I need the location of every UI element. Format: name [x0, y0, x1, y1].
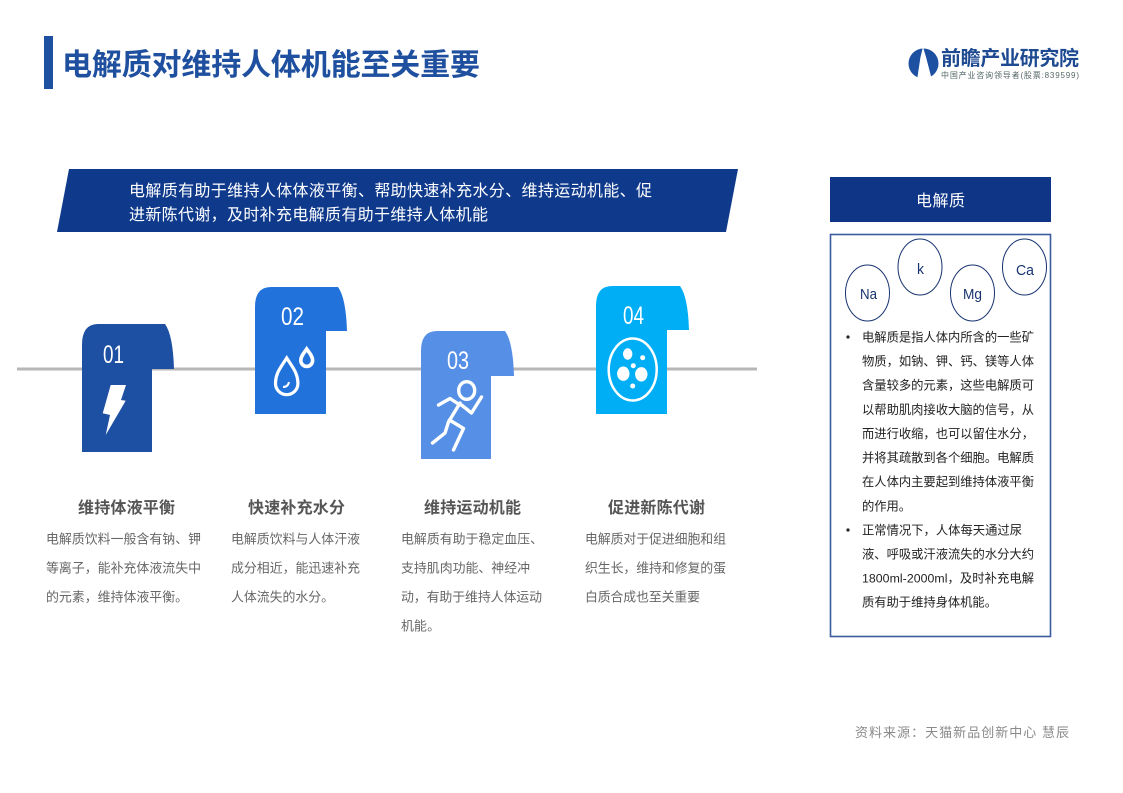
- column 3 text: [401, 498, 547, 634]
- description: 电解质有助于稳定血压、: [401, 532, 543, 546]
- logo tagline: 中国产业咨询领导者(股票:839599): [941, 70, 1079, 80]
- step 04 tab: [596, 286, 689, 414]
- panel: electrolytes: [830, 234, 1050, 636]
- icon: logo tower: [908, 47, 938, 80]
- title accent bar: [44, 36, 53, 89]
- step number 02: 02: [281, 303, 304, 331]
- source note: 资料来源：天猫新品创新中心 慧辰: [855, 725, 1069, 740]
- bullet list: 物质，如钠、钾、钙、镁等人体: [862, 354, 1034, 368]
- title: 电解质对维持人体机能至关重要: [62, 49, 480, 82]
- element circle Na: [846, 265, 890, 321]
- bullet list: 电解质是指人体内所含的一些矿: [862, 330, 1034, 344]
- description: 电解质饮料与人体汗液: [231, 532, 360, 546]
- bullet list: 的作用。: [862, 498, 911, 514]
- icon: water drops: [276, 349, 313, 395]
- step number 04: 04: [623, 302, 644, 330]
- bullet list: 以帮助肌肉接收大脑的信号，从: [862, 402, 1034, 417]
- description: 的元素，维持体液平衡。: [46, 590, 188, 604]
- bullet list: 并将其疏散到各个细胞。电解质: [862, 450, 1034, 465]
- element circle k: [898, 239, 942, 295]
- bullet list: [846, 330, 1037, 610]
- step number 03: 03: [447, 347, 469, 375]
- timeline line: [17, 368, 757, 370]
- description: 成分相近，能迅速补充: [231, 560, 360, 576]
- summary banner: [57, 169, 738, 232]
- icon: runner: [432, 382, 482, 450]
- description: 电解质对于促进细胞和组: [585, 532, 726, 546]
- description: 动，有助于维持人体运动: [401, 590, 542, 604]
- step 03 tab: [421, 331, 514, 459]
- bullet list: 正常情况下，人体每天通过尿: [862, 522, 1022, 538]
- bullet list: 质有助于维持身体机能。: [862, 594, 997, 610]
- step 01 tab: [82, 324, 174, 452]
- element circle Na: Na: [860, 286, 878, 303]
- banner text: 电解质有助于维持人体体液平衡、帮助快速补充水分、维持运动机能、促: [129, 182, 652, 200]
- description: 白质合成也至关重要: [585, 590, 700, 604]
- step 02 tab: [255, 287, 347, 414]
- bullet list: 在人体内主要起到维持体液平衡: [862, 474, 1034, 489]
- heading: 维持运动机能: [424, 498, 521, 517]
- column 2 text: [231, 498, 364, 604]
- bullet list: 1800ml-2000ml，及时补充电解: [862, 570, 1034, 586]
- description: 等离子，能补充体液流失中: [46, 560, 201, 576]
- bullet list: 而进行收缩，也可以留住水分，: [862, 426, 1034, 441]
- heading: 维持体液平衡: [78, 498, 175, 517]
- icon: petri dish: [609, 338, 657, 400]
- heading: 促进新陈代谢: [608, 498, 705, 517]
- element circle Mg: [950, 265, 994, 321]
- column 4 text: [585, 498, 730, 604]
- heading: 快速补充水分: [248, 498, 345, 517]
- step number 01: 01: [103, 341, 124, 369]
- element circle k: k: [917, 261, 924, 278]
- description: 电解质饮料一般含有钠、钾: [46, 532, 201, 546]
- description: 织生长，维持和修复的蛋: [585, 560, 726, 576]
- panel header: [830, 177, 1051, 222]
- description: 机能。: [401, 618, 440, 634]
- description: 支持肌肉功能、神经冲: [401, 560, 530, 576]
- bullet list: 液、呼吸或汗液流失的水分大约: [862, 546, 1034, 562]
- banner text: 进新陈代谢，及时补充电解质有助于维持人体机能: [129, 206, 488, 224]
- element circle Mg: Mg: [963, 286, 982, 303]
- icon: lightning bolt: [103, 385, 126, 435]
- logo: [908, 46, 1079, 80]
- panel heading: 电解质: [916, 192, 965, 210]
- logo name: 前瞻产业研究院: [941, 46, 1079, 70]
- element circle Ca: Ca: [1016, 262, 1035, 279]
- bullet list: 含量较多的元素，这些电解质可: [862, 378, 1034, 392]
- column 1 text: [46, 498, 205, 604]
- element circle Ca: [1002, 239, 1046, 295]
- description: 人体流失的水分。: [231, 590, 334, 604]
